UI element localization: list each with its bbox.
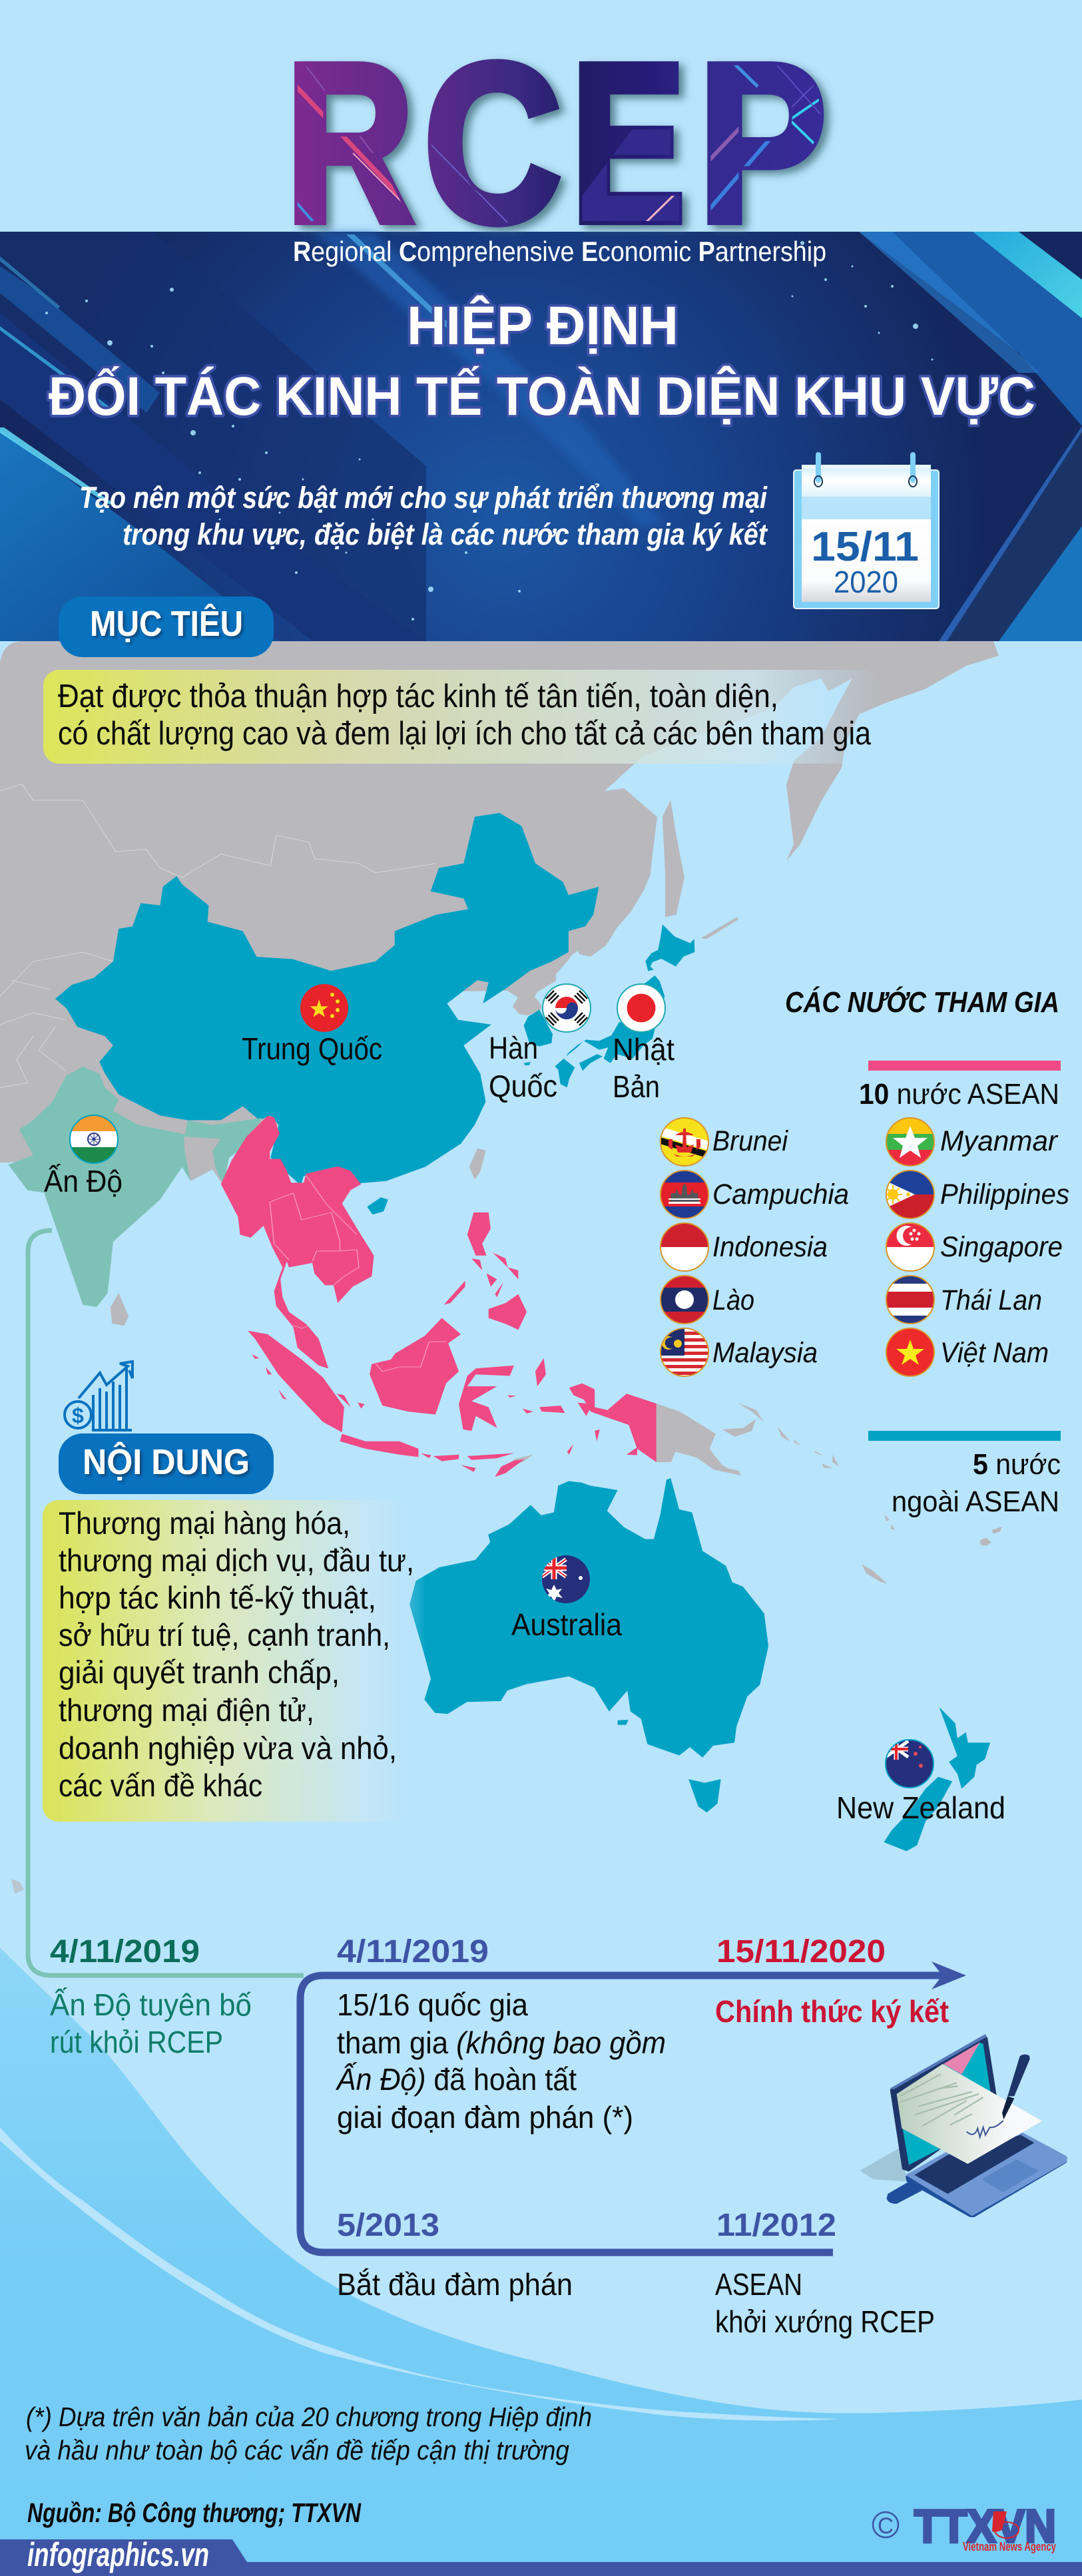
legend: non-ASEAN: ngoài ASEAN xyxy=(892,1485,1059,1518)
timeline: 5/2013: 5/2013 xyxy=(337,2208,439,2243)
flag: New Zealand xyxy=(886,1740,934,1788)
ASEAN country names: Lào xyxy=(712,1284,754,1316)
timeline: India withdrawal: Ấn Độ tuyên bố xyxy=(50,1987,252,2022)
panel: content list xyxy=(43,1500,425,1822)
panel: objective pill: MỤC TIÊU xyxy=(90,603,243,644)
map: ASEAN (pink) xyxy=(221,1116,657,1477)
source: Nguồn: Bộ Công thương; TTXVN xyxy=(27,2497,362,2528)
flag: South Korea xyxy=(543,984,591,1032)
map: ASEAN border lines xyxy=(270,1175,446,1372)
timeline: 4/11/2019: tham gia (không bao gồm xyxy=(337,2025,666,2060)
title: RCEP: E xyxy=(571,17,686,270)
ASEAN country names: Myanmar xyxy=(940,1125,1059,1157)
legend: non-ASEAN: 5 nước xyxy=(973,1448,1061,1481)
timeline: 11/2012 xyxy=(715,2208,935,2339)
map: Australia and New Zealand (teal) xyxy=(409,1478,990,1851)
flag: Singapore xyxy=(886,1223,934,1271)
icon: calendar 15/11/2020: 15/11 xyxy=(811,524,919,570)
lower background sweep xyxy=(0,1947,1082,2576)
country labels on map: Australia xyxy=(511,1607,622,1642)
timeline: 15/11/2020: Chính thức ký kết xyxy=(715,1994,949,2029)
map: India (green) xyxy=(8,1067,262,1307)
ASEAN country names: Philippines xyxy=(940,1178,1069,1210)
ASEAN country names: Singapore xyxy=(940,1231,1063,1263)
subtitle: full English name: Regional Comprehensive Economic Partnership xyxy=(293,236,826,267)
flag: Japan xyxy=(617,984,665,1032)
icon: calendar 15/11/2020: 2020 xyxy=(834,565,898,599)
panel: content pill xyxy=(59,1433,274,1494)
timeline: 11/2012: 11/2012 xyxy=(716,2208,836,2243)
icon: growth chart with dollar coin xyxy=(65,1362,133,1430)
arrow: timeline path xyxy=(300,1961,966,2252)
timeline: 4/11/2019: Ấn Độ) đã hoàn tất xyxy=(335,2062,577,2097)
flag: Indonesia xyxy=(661,1223,708,1271)
timeline: 4/11/2019 xyxy=(335,1934,666,2135)
heading: agreement name xyxy=(49,296,1035,427)
footnote: và hầu như toàn bộ các vấn đề tiếp cận thị trường xyxy=(25,2435,569,2465)
flag: Brunei xyxy=(658,1118,711,1166)
country labels on map: Hàn xyxy=(489,1031,538,1065)
banner background xyxy=(0,232,1082,641)
country labels on map: Trung Quốc xyxy=(242,1031,382,1066)
legend: ASEAN: 10 nước ASEAN xyxy=(859,1078,1059,1111)
panel: content pill: NỘI DUNG xyxy=(83,1441,250,1482)
title: RCEP: R xyxy=(286,17,414,270)
icon: calendar 15/11/2020 xyxy=(794,452,939,609)
ASEAN country names: Brunei xyxy=(712,1125,788,1157)
panel: content list: Thương mại hàng hóa, xyxy=(59,1505,350,1541)
timeline: 11/2012: ASEAN xyxy=(715,2267,802,2302)
panel: content list: giải quyết tranh chấp, xyxy=(59,1655,340,1690)
ASEAN country names: Indonesia xyxy=(712,1231,828,1263)
country labels on map: New Zealand xyxy=(836,1790,1005,1825)
timeline: 4/11/2019: giai đoạn đàm phán (*) xyxy=(337,2100,633,2135)
heading: agreement name: ĐỐI TÁC KINH TẾ TOÀN DIỆN KHU VỰC xyxy=(49,366,1035,427)
ASEAN country names xyxy=(712,1125,1069,1369)
timeline: India withdrawal: rút khỏi RCEP xyxy=(50,2025,223,2059)
panel: objective text: Đạt được thỏa thuận hợp tác kinh tế tân tiến, toàn diện, xyxy=(58,678,778,714)
heading: agreement name: HIỆP ĐỊNH xyxy=(407,296,678,356)
panel: content list: thương mại điện tử, xyxy=(59,1692,314,1728)
timeline: 15/11/2020: 15/11/2020 xyxy=(716,1934,886,1969)
flag: China xyxy=(300,984,348,1032)
panel: content list: doanh nghiệp vừa và nhỏ, xyxy=(59,1730,397,1766)
country labels on map: Nhật xyxy=(613,1032,675,1067)
arrow: India withdrawal green line xyxy=(28,1230,304,1975)
legend: non-ASEAN xyxy=(868,1431,1061,1518)
panel: objective text: có chất lượng cao và đem lại lợi ích cho tất cả các bên tham gia xyxy=(58,716,872,752)
ASEAN country names: Việt Nam xyxy=(940,1337,1049,1369)
footnote: (*) Dựa trên văn bản của 20 chương trong Hiệp định xyxy=(26,2402,592,2432)
map: grey land xyxy=(0,641,1002,1894)
legend: ASEAN xyxy=(859,1061,1061,1111)
panel: content list: hợp tác kinh tế-kỹ thuật, xyxy=(59,1580,376,1615)
timeline: India withdrawal xyxy=(50,1934,252,2059)
country labels on map xyxy=(44,1031,1005,1825)
panel: content list: sở hữu trí tuệ, cạnh tranh, xyxy=(59,1617,390,1653)
tagline: Tạo nên một sức bật mới cho sự phát triển thương mại xyxy=(79,481,768,515)
tagline: trong khu vực, đặc biệt là các nước tham gia ký kết xyxy=(123,517,768,551)
flag: Laos xyxy=(661,1276,708,1324)
panel: content list: các vấn đề khác xyxy=(59,1768,262,1803)
timeline: 15/11/2020 xyxy=(715,1934,949,2029)
flag: Thailand xyxy=(886,1276,934,1324)
timeline: 5/2013 xyxy=(337,2208,573,2302)
tagline xyxy=(79,481,768,551)
timeline: India withdrawal: 4/11/2019 xyxy=(50,1934,200,1969)
title: RCEP: C xyxy=(423,17,562,270)
timeline: 5/2013: Bắt đầu đàm phán xyxy=(337,2267,573,2302)
map: Korea and Japan (teal) xyxy=(524,924,694,1087)
logo: TTXVN: TTXVN xyxy=(914,2500,1056,2552)
timeline: 4/11/2019: 15/16 quốc gia xyxy=(337,1987,528,2022)
icon: growth chart with dollar coin: $ xyxy=(72,1404,84,1427)
panel: content list: thương mại dịch vụ, đầu tư, xyxy=(59,1543,414,1578)
panel: objective text xyxy=(43,670,879,764)
flag: Philippines xyxy=(884,1170,934,1218)
country labels on map: Ấn Độ xyxy=(44,1164,123,1198)
flag: Myanmar xyxy=(886,1118,934,1166)
title: RCEP: P xyxy=(698,17,827,270)
footer bar: infographics.vn xyxy=(27,2536,209,2573)
timeline: 11/2012: khởi xướng RCEP xyxy=(715,2304,935,2339)
timeline: 4/11/2019: 4/11/2019 xyxy=(337,1934,489,1969)
ASEAN country names: Malaysia xyxy=(712,1337,818,1369)
ASEAN country names: Thái Lan xyxy=(940,1284,1042,1316)
footnote xyxy=(25,2402,592,2465)
map: China (teal) xyxy=(55,813,599,1214)
footer bar xyxy=(0,2536,1082,2576)
flag: India xyxy=(70,1115,118,1163)
icon: laptop with signed document xyxy=(860,2034,1067,2217)
flag: Australia xyxy=(542,1555,590,1603)
title: RCEP xyxy=(294,57,834,234)
ASEAN country names: Campuchia xyxy=(712,1178,849,1210)
map: grey border lines xyxy=(0,784,436,1087)
logo: TTXVN: C xyxy=(878,2513,894,2539)
panel: objective pill xyxy=(59,597,274,657)
country labels on map: Quốc xyxy=(489,1069,557,1103)
flag: Malaysia xyxy=(661,1328,708,1376)
flag: Cambodia xyxy=(661,1170,708,1218)
country labels on map: Bản xyxy=(613,1069,660,1104)
flag: Vietnam xyxy=(886,1328,934,1376)
